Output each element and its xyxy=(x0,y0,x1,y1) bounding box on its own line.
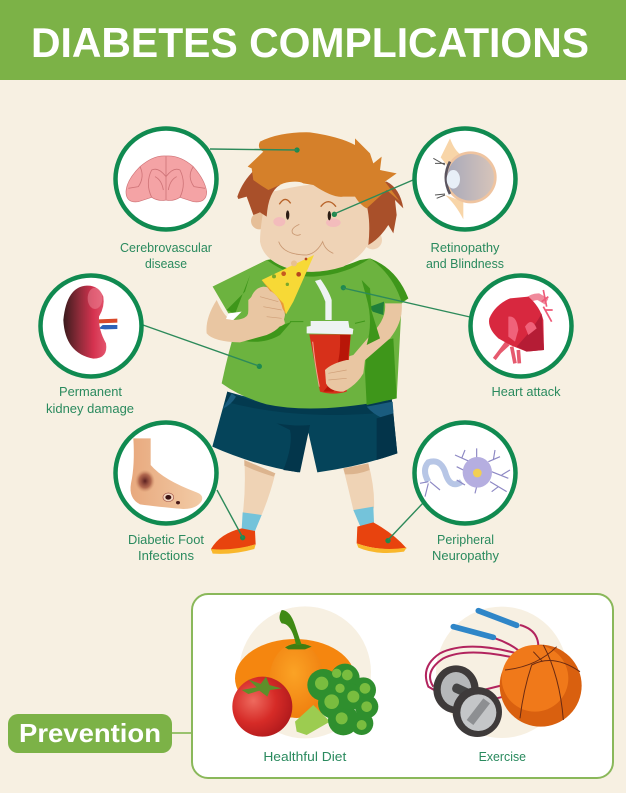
boy hand holding pizza xyxy=(248,291,285,333)
panel: prevention box xyxy=(192,594,613,778)
basketball xyxy=(500,645,582,727)
panel: peripheral neuropathy xyxy=(414,422,516,563)
label: diabetic foot infections xyxy=(128,533,205,563)
dumbbell xyxy=(433,665,502,737)
icon: healthy food group xyxy=(232,606,378,764)
label: cerebrovascular disease xyxy=(120,241,212,271)
icon: eye xyxy=(433,138,497,219)
label: permanent kidney damage: kidney damage xyxy=(46,402,134,416)
icon: kidney xyxy=(63,286,117,359)
boy shoes xyxy=(211,522,407,554)
pumpkin xyxy=(235,610,355,718)
boy socks xyxy=(242,507,374,531)
label: retinopathy and blindness: and Blindness xyxy=(426,257,504,271)
panel: cerebrovascular disease xyxy=(116,128,216,271)
label: peripheral neuropathy xyxy=(432,533,500,563)
label: retinopathy and blindness: Retinopathy xyxy=(430,241,500,255)
boy head xyxy=(251,184,382,272)
icon: neuron xyxy=(420,448,510,497)
panel: diabetic foot infections xyxy=(116,422,216,563)
label: heart attack: Heart attack xyxy=(492,385,561,399)
label: cerebrovascular disease: disease xyxy=(145,257,187,271)
label: peripheral neuropathy: Peripheral xyxy=(437,533,494,547)
broccoli xyxy=(295,664,378,735)
icon: foot xyxy=(131,438,202,509)
panel: heart attack xyxy=(470,276,572,399)
prevention badge xyxy=(8,714,172,753)
label: healthful diet: Healthful Diet xyxy=(263,750,347,764)
boy arms xyxy=(206,287,402,392)
callout dots xyxy=(240,147,391,543)
panel: retinopathy and blindness xyxy=(414,128,516,271)
prevention connector xyxy=(170,732,192,734)
label: peripheral neuropathy: Neuropathy xyxy=(432,549,500,563)
label: exercise: Exercise xyxy=(479,750,526,764)
red drink cup xyxy=(307,321,353,394)
title banner: DIABETES COMPLICATIONS xyxy=(31,19,589,66)
prevention badge: Prevention xyxy=(19,718,161,748)
boy hair xyxy=(237,132,403,245)
pizza slice xyxy=(262,255,314,314)
label: permanent kidney damage: Permanent xyxy=(59,385,123,399)
boy shorts xyxy=(212,392,397,472)
boy shirt sleeve xyxy=(213,260,380,345)
boy hand holding cup xyxy=(325,360,365,392)
label: permanent kidney damage xyxy=(46,385,134,416)
illustration: boy eating pizza and holding a drink xyxy=(206,132,408,554)
label: retinopathy and blindness xyxy=(426,241,504,271)
label: diabetic foot infections: Diabetic Foot xyxy=(128,533,205,547)
icon: heart xyxy=(489,290,553,363)
label: cerebrovascular disease: Cerebrovascular xyxy=(120,241,212,255)
connector lines xyxy=(143,149,470,540)
drinking straw xyxy=(315,279,332,320)
icon: brain xyxy=(126,156,207,202)
label: diabetic foot infections: Infections xyxy=(138,549,194,563)
jump rope xyxy=(426,611,538,698)
tomato xyxy=(232,677,292,737)
panel: permanent kidney damage xyxy=(40,276,142,416)
boy legs xyxy=(243,460,374,515)
icon: exercise equipment group xyxy=(426,607,582,764)
title banner xyxy=(0,0,626,80)
boy shirt xyxy=(213,258,408,408)
